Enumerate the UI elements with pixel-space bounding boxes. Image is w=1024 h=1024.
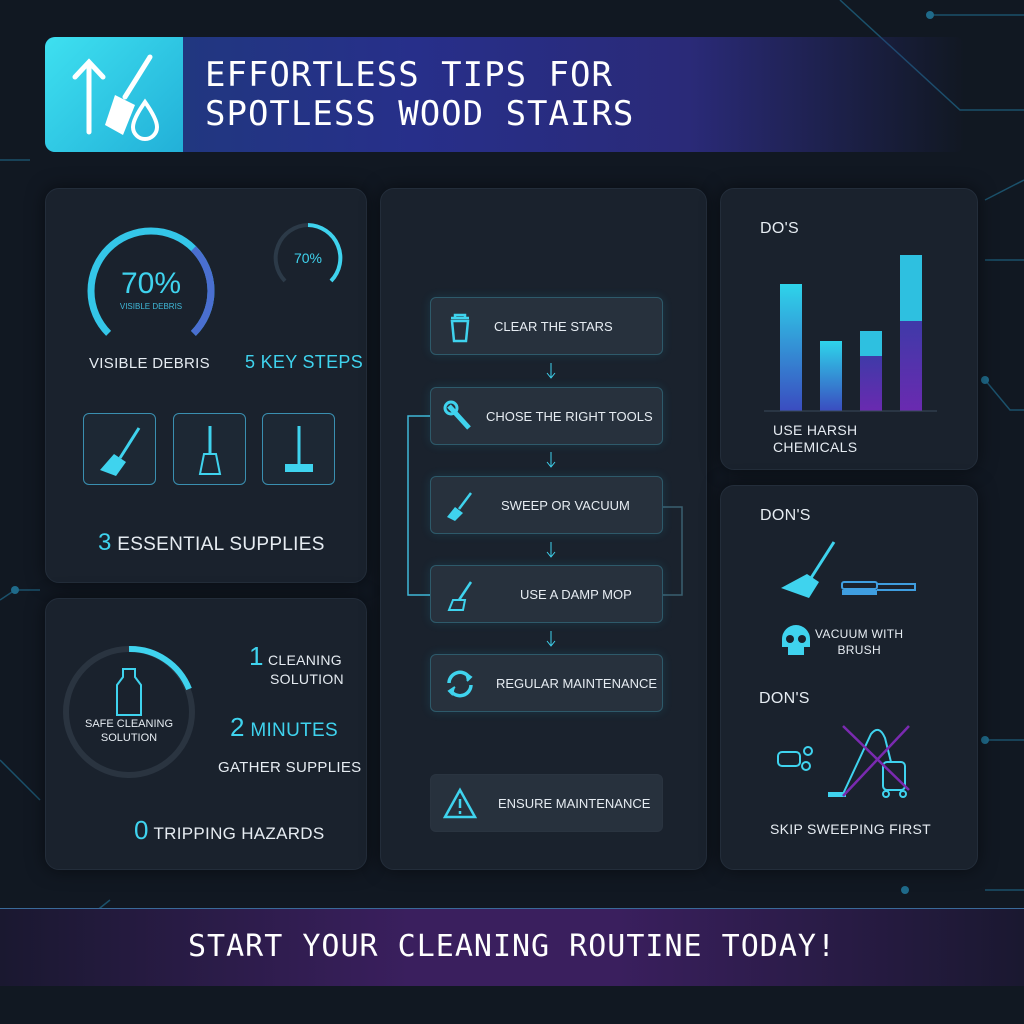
- panel: stats bottom-left: GATHER SUPPLIES: [218, 759, 361, 776]
- panel: do's chart: DO'S: [760, 220, 799, 237]
- ring chart: SAFE CLEANING: [85, 718, 173, 730]
- title: SPOTLESS WOOD STAIRS: [205, 94, 634, 134]
- step 5: [430, 654, 663, 712]
- panel: steps: [380, 188, 707, 870]
- panel: don'ts: DON'S: [759, 690, 810, 707]
- step 6: [430, 774, 663, 832]
- gauge: 70% visible debris: VISIBLE DEBRIS: [120, 302, 182, 311]
- panel: stats top-left: VISIBLE DEBRIS: [89, 355, 210, 372]
- panel: do's chart: CHEMICALS: [773, 439, 857, 455]
- footer banner: [0, 908, 1024, 986]
- panel: do's chart: USE HARSH: [773, 422, 857, 438]
- step 1: [430, 297, 663, 355]
- icon: crossed vacuum: [777, 725, 910, 798]
- panel: don'ts: VACUUM WITH: [815, 627, 903, 641]
- panel: stats bottom-left: 2 MINUTES: [230, 712, 338, 742]
- gauge: small 70%: 70%: [294, 250, 322, 266]
- icon: arrow broom drop: [45, 37, 183, 152]
- panel: stats top-left: 3 ESSENTIAL SUPPLIES: [98, 529, 325, 556]
- panel: stats top-left: 5 KEY STEPS: [245, 352, 363, 372]
- footer banner: START YOUR CLEANING ROUTINE TODAY!: [188, 929, 836, 964]
- bar chart: [764, 255, 937, 412]
- title: [205, 55, 634, 134]
- step 4: USE A DAMP MOP: [520, 587, 632, 602]
- arrow: [546, 631, 556, 647]
- panel: stats bottom-left: 0 TRIPPING HAZARDS: [134, 815, 325, 845]
- step 6: ENSURE MAINTENANCE: [498, 796, 650, 811]
- step 3: SWEEP OR VACUUM: [501, 498, 630, 513]
- panel: stats bottom-left: 1 CLEANING: [249, 641, 342, 671]
- header banner: [45, 37, 965, 152]
- step 2: CHOSE THE RIGHT TOOLS: [486, 409, 653, 424]
- icon: skull: [782, 625, 810, 655]
- gauge: small 70%: [274, 223, 342, 282]
- panel: don'ts: [720, 485, 978, 870]
- arrow: [546, 363, 556, 379]
- step 1: CLEAR THE STARS: [494, 319, 613, 334]
- panel: stats top-left: [45, 188, 367, 583]
- arrow: [546, 542, 556, 558]
- panel: don'ts: DON'S: [760, 507, 811, 524]
- arrow: [546, 452, 556, 468]
- title: EFFORTLESS TIPS FOR: [205, 55, 613, 95]
- panel: stats bottom-left: [45, 598, 367, 870]
- icons: supplies: [83, 413, 156, 485]
- icon: broom and brush: [781, 541, 916, 598]
- ring chart: SOLUTION: [101, 732, 157, 744]
- gauge: 70% visible debris: 70%: [121, 267, 181, 300]
- gauge: 70% visible debris: [88, 228, 214, 336]
- panel: stats bottom-left: SOLUTION: [270, 671, 344, 687]
- panel: don'ts: SKIP SWEEPING FIRST: [770, 821, 931, 837]
- step 4: [430, 565, 663, 623]
- connector lines: [407, 415, 683, 596]
- step 5: REGULAR MAINTENANCE: [496, 676, 657, 691]
- step 3: [430, 476, 663, 534]
- step 2: [430, 387, 663, 445]
- panel: don'ts: BRUSH: [837, 643, 881, 657]
- panel: do's chart: [720, 188, 978, 470]
- ring chart: [63, 646, 195, 778]
